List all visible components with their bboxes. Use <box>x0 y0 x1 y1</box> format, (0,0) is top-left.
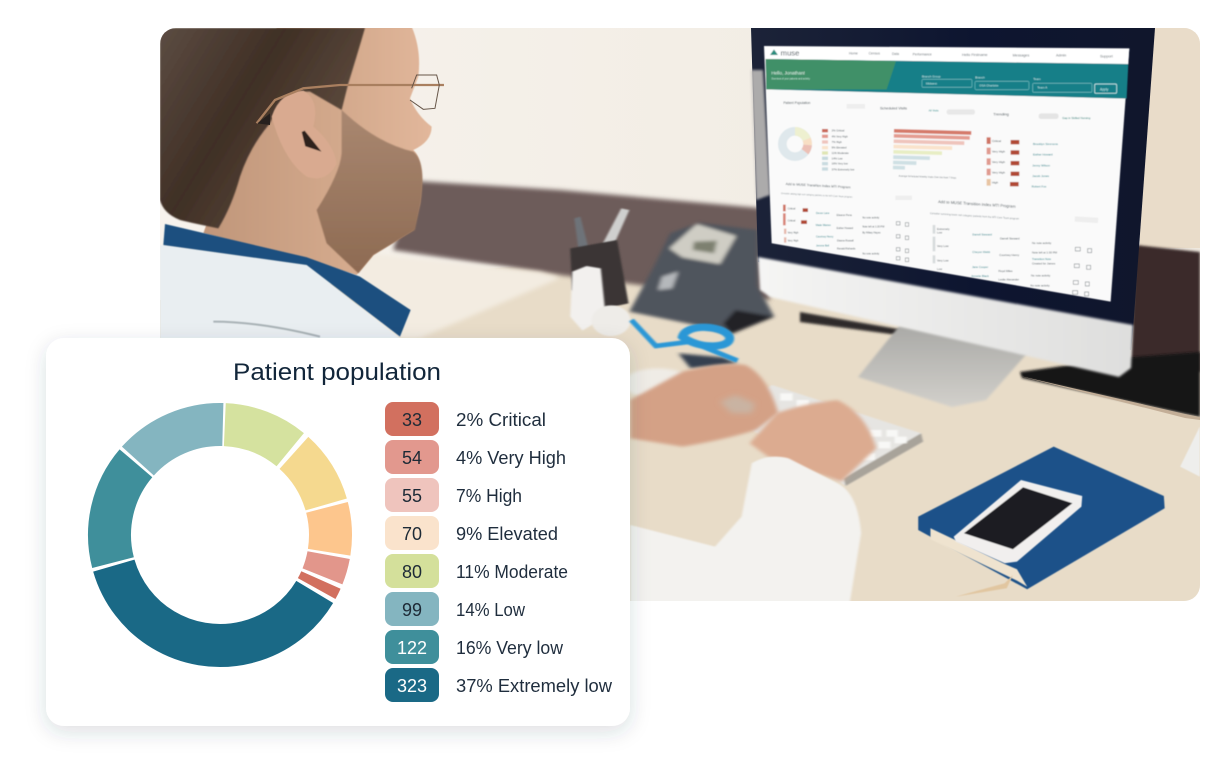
app header: muse <box>781 48 799 57</box>
greeting banner: Overview of your patients and activity <box>771 77 811 80</box>
mini legend rows: 37% Extremely low <box>832 167 854 171</box>
legend row: very low: 16% Very low <box>456 638 564 658</box>
legend row: high: 7% High <box>456 486 522 506</box>
white bottle <box>570 266 606 331</box>
left hand <box>630 364 778 447</box>
legend row: high <box>385 478 522 512</box>
greeting banner: Team <box>1033 77 1041 81</box>
transition index table left <box>781 182 912 262</box>
blue cord <box>631 320 737 361</box>
trending mini panel: Jacob Jones <box>1032 174 1050 178</box>
panel: patient population card <box>46 338 630 726</box>
legend row: very low <box>385 630 564 664</box>
trending mini panel: Jenny Wilson <box>1032 163 1050 167</box>
transition index table right: Transition Note <box>1032 257 1051 261</box>
transition index table right: No note activity <box>1030 284 1050 288</box>
scheduled visits mini bar chart: All Visits <box>929 108 939 112</box>
trending mini panel: Brooklyn Simmons <box>1033 142 1058 146</box>
transition index table right: Low <box>937 267 943 271</box>
legend row: low: 14% Low <box>456 600 526 620</box>
legend <box>385 402 613 702</box>
pens <box>574 208 629 248</box>
legend row: elevated <box>385 516 558 550</box>
transition index table left: Very High <box>788 231 799 234</box>
trending mini panel: Very High <box>992 171 1005 175</box>
reflection on left bezel <box>751 70 770 200</box>
scheduled visits mini bar chart: Average Scheduled Weekly Visits Over the Next 7 Days <box>899 175 957 180</box>
transition index table left: Critical <box>788 208 796 211</box>
trending mini panel <box>987 111 1091 189</box>
app header: Home <box>849 52 858 56</box>
dark brown wall band <box>393 181 770 300</box>
legend row: moderate: 11% Moderate <box>456 562 568 582</box>
greeting banner: Midwest <box>926 82 937 86</box>
monitor bezel <box>751 28 1155 350</box>
patient population mini panel: Patient Population <box>783 101 810 105</box>
transition index table right: Consider removing lower risk category patients from the MTI Care Team program <box>930 212 1019 221</box>
beard <box>317 110 423 273</box>
trending mini panel: Critical <box>992 139 1001 143</box>
transition index table left: No note activity <box>862 253 880 256</box>
notebook cover <box>918 447 1165 589</box>
transition index table left: Wade Warren <box>816 224 831 227</box>
transition index table right: No note activity <box>1031 274 1051 278</box>
mini legend rows: 9% Elevated <box>832 145 847 149</box>
light desk area behind the man <box>360 252 560 338</box>
monitor stand <box>800 312 1030 407</box>
app header: Hello Firstname <box>962 53 988 57</box>
transition index table left: Esther Howard <box>837 227 854 230</box>
heading: Patient population <box>233 359 441 386</box>
white coat <box>160 245 402 340</box>
transition index table right: Add to MUSE Transition Index MTI Program <box>938 199 1016 209</box>
transition index table left: Add to MUSE Transition Index MTI Program <box>786 182 851 189</box>
wall background <box>160 28 1200 330</box>
mini legend rows: 16% Very low <box>832 162 848 166</box>
telephone <box>629 223 774 334</box>
pen holder <box>570 240 629 308</box>
transition index table left: No note activity <box>862 217 880 220</box>
transition index table right: Annette Black <box>971 274 989 278</box>
right hand <box>750 400 876 482</box>
transition index table right <box>930 199 1098 296</box>
desk items: pen holder, bottle, telephone, cord <box>570 208 774 398</box>
legend row: very low: 122 <box>397 638 427 658</box>
legend row: extremely low: 323 <box>397 676 427 696</box>
mini legend rows: 4% Very High <box>832 134 848 138</box>
paper sheet at edge <box>1180 427 1200 477</box>
transition index table right: Jane Cooper <box>972 265 988 269</box>
app header: Messages <box>1013 53 1029 57</box>
transition index table left: Courtney Henry <box>816 235 834 238</box>
legend row: critical: 33 <box>402 410 422 430</box>
legend row: critical <box>385 402 546 436</box>
trending mini panel: Esther Howard <box>1033 153 1053 157</box>
transition index table right: Leslie Alexander <box>998 278 1019 282</box>
greeting banner: Branch Group <box>922 74 941 78</box>
app header: Performance <box>913 52 932 56</box>
legend row: high: 55 <box>402 486 422 506</box>
transition index table left: Devon Lane <box>816 212 830 215</box>
bookmark ribbon <box>956 575 1013 597</box>
white sleeve <box>630 457 861 603</box>
cream wall right of monitor <box>1140 28 1200 248</box>
mini donut <box>782 131 808 157</box>
app header: Support <box>1100 54 1113 58</box>
greeting banner <box>766 59 1128 99</box>
trending mini panel: Robert Fox <box>1032 185 1047 189</box>
mini legend rows <box>822 129 854 171</box>
app header: Data <box>892 52 899 56</box>
trending mini panel: Very High <box>992 149 1005 153</box>
hands, keyboard, notebook and phone on desk <box>630 364 1200 603</box>
dark strap <box>678 353 737 368</box>
donut chart <box>64 379 376 691</box>
transition index table left: Eleanor Pena <box>837 214 852 217</box>
legend row: extremely low: 37% Extremely low <box>456 676 613 696</box>
trending mini panel: Gap in Skilled Nursing <box>1062 116 1091 120</box>
legend row: very high: 54 <box>402 448 422 468</box>
notebook pages <box>930 528 1027 587</box>
legend row: extremely low <box>385 668 613 702</box>
mini legend rows: 2% Critical <box>832 129 845 133</box>
legend row: low: 99 <box>402 600 422 620</box>
black tablet on desk <box>1020 352 1200 417</box>
glasses <box>257 75 444 125</box>
scheduled visits mini bar chart <box>880 106 975 180</box>
legend row: very high <box>385 440 566 474</box>
trending mini panel: Very High <box>992 160 1005 164</box>
keyboard <box>754 385 924 486</box>
app header: Census <box>869 52 880 56</box>
legend row: moderate <box>385 554 568 588</box>
legend row: elevated: 70 <box>402 524 422 544</box>
trending mini panel: Trending <box>993 111 1009 116</box>
transition index table right: Very Low <box>937 244 950 248</box>
transition index table right: Darrell Steward <box>1000 236 1020 240</box>
dark cabinet right of monitor <box>1130 245 1200 372</box>
legend row: elevated: 9% Elevated <box>456 524 558 544</box>
white round object <box>591 305 631 336</box>
transition index table left: Very High <box>788 239 799 242</box>
greeting banner: Branch <box>975 76 985 80</box>
face and neck <box>203 27 432 275</box>
transition index table left: Dianne Russell <box>837 239 854 242</box>
transition index table right: No note activity <box>1032 241 1052 245</box>
logo <box>770 49 778 55</box>
keys between fingers <box>720 395 755 413</box>
trending mini panel: High <box>992 181 998 185</box>
transition index table left: Jerome Bell <box>816 245 830 248</box>
greeting banner: Team A <box>1037 85 1047 89</box>
transition index table right: Cheyon Webb <box>972 250 991 254</box>
transition index table left: By Hillary Hayes <box>862 231 881 234</box>
app header: Admin <box>1056 54 1066 58</box>
transition index table right: Floyd Miles <box>998 269 1013 273</box>
scheduled visits mini bar chart: Scheduled Visits <box>880 106 907 110</box>
app header <box>765 47 1129 64</box>
transition index table left: Critical <box>788 219 796 222</box>
patient population mini panel <box>782 101 865 171</box>
man's head and coat <box>160 27 444 340</box>
smartphone <box>954 480 1082 563</box>
white cloth under hand <box>630 368 681 396</box>
greeting banner: OSA Charlotte <box>979 84 999 88</box>
transition index table right: Note left at 1:30 PM <box>1032 250 1058 254</box>
legend row: very high: 4% Very High <box>456 448 566 468</box>
legend row: moderate: 80 <box>402 562 422 582</box>
legend row: critical: 2% Critical <box>456 410 546 430</box>
monitor chin <box>758 257 1133 377</box>
transition index table left: Note left at 1:20 PM <box>862 225 884 228</box>
transition index table right: Low <box>937 230 943 234</box>
transition index table right: Courtney Henry <box>999 253 1020 257</box>
greeting banner: Hello, Jonathan! <box>771 71 805 76</box>
mini legend rows: 7% High <box>832 140 842 144</box>
screen background <box>764 46 1129 302</box>
transition index table left: Ronald Richards <box>837 247 856 250</box>
desk surface <box>160 262 1200 601</box>
ear <box>272 91 337 178</box>
transition index table left: Consider adding high risk category patients to the MTI Care Team program <box>781 192 853 199</box>
blue collar <box>163 224 411 337</box>
transition index table right: Created for James <box>1032 262 1056 266</box>
greeting banner: Apply <box>1100 87 1109 91</box>
hair <box>160 28 365 228</box>
transition index table right: Very Low <box>937 259 950 263</box>
mini legend rows: 11% Moderate <box>832 151 849 155</box>
transition index table right: Darrell Steward <box>972 233 992 237</box>
monitor screen dashboard <box>764 46 1129 302</box>
transition index table right: Extremely <box>937 227 950 231</box>
legend row: low <box>385 592 526 626</box>
photo: doctor at desk using computer <box>160 27 1200 603</box>
mini legend rows: 14% Low <box>832 156 843 160</box>
